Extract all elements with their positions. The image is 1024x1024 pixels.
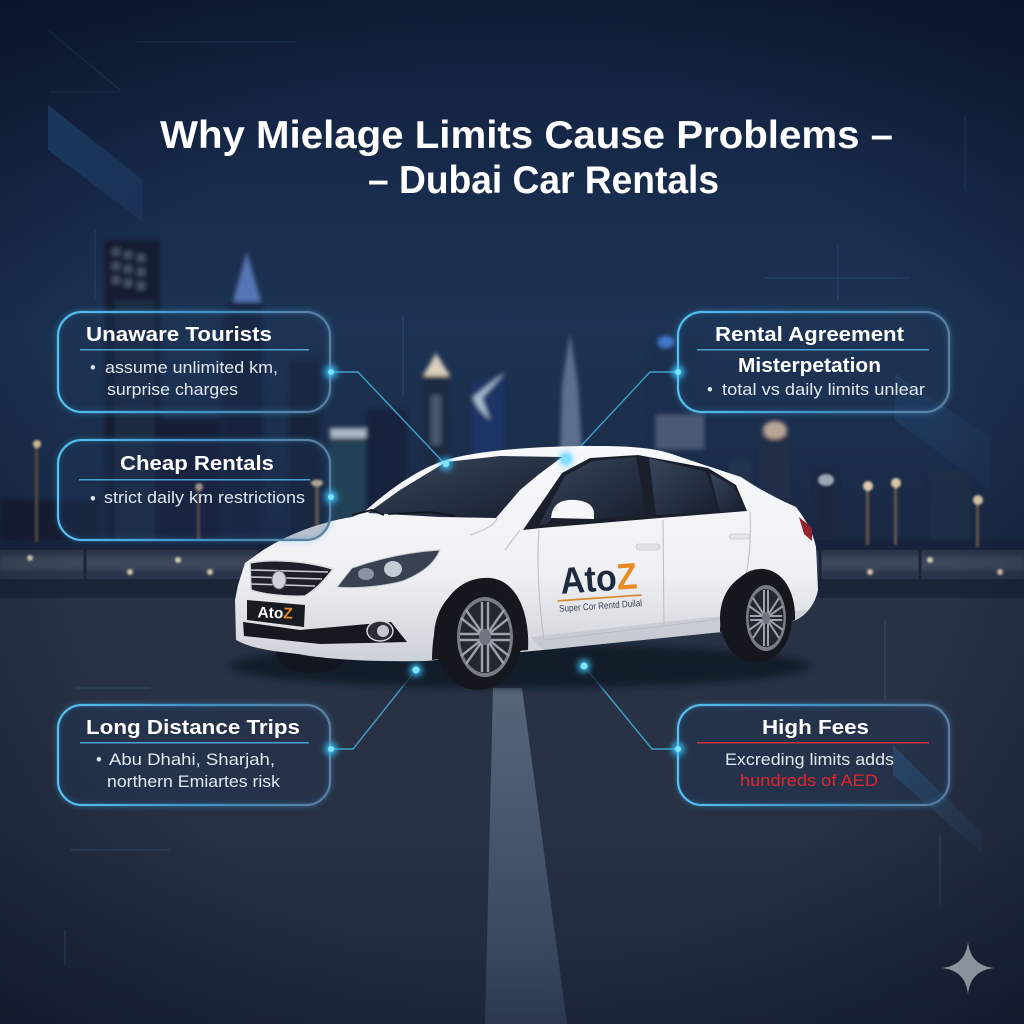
far-side wheels xyxy=(276,635,348,673)
panel: Unaware Tourists: assume unlimited km, xyxy=(105,359,278,377)
front plate logo xyxy=(247,600,305,627)
title: – Dubai Car Rentals xyxy=(368,159,719,202)
panel: Rental Agreement Misterpetation xyxy=(678,312,949,412)
grille xyxy=(250,561,333,596)
rear wheel xyxy=(720,573,792,663)
title xyxy=(160,114,893,202)
panel: Unaware Tourists: surprise charges xyxy=(107,381,238,399)
icon: sparkle star xyxy=(942,942,994,994)
car xyxy=(230,446,818,690)
panel: High Fees: hundreds of AED xyxy=(740,772,878,790)
panel: Cheap Rentals xyxy=(58,440,330,540)
door logo: AtoZ xyxy=(559,555,639,602)
guardrail with city lights xyxy=(0,548,1024,598)
panel: Long Distance Trips: Abu Dhahi, Sharjah, xyxy=(109,751,275,769)
quarter window xyxy=(710,473,745,512)
title: Why Mielage Limits Cause Problems – xyxy=(160,114,893,157)
windshield xyxy=(368,456,562,518)
panel: Long Distance Trips: northern Emiartes risk xyxy=(107,773,281,791)
heading: High Fees xyxy=(762,716,869,739)
panel: Unaware Tourists xyxy=(58,312,330,412)
panel: Long Distance Trips xyxy=(58,705,330,805)
decorative tech shapes xyxy=(48,30,990,490)
mirror xyxy=(551,500,594,521)
front plate logo: AtoZ xyxy=(257,604,294,623)
street lights xyxy=(33,440,983,547)
heading: Cheap Rentals xyxy=(120,452,274,475)
connector lines xyxy=(330,372,678,749)
blurred Dubai skyline xyxy=(0,240,1024,570)
body text: • xyxy=(96,751,102,769)
headlight xyxy=(337,550,440,588)
heading: Unaware Tourists xyxy=(86,323,272,346)
lower intake xyxy=(243,622,407,644)
panel: High Fees xyxy=(678,705,949,805)
panel: Rental Agreement Misterpetation: Misterpetation xyxy=(738,354,881,377)
panel: Cheap Rentals: strict daily km restrictions xyxy=(104,489,305,507)
front side window xyxy=(539,457,646,525)
road centre stripe xyxy=(485,688,567,1024)
fog light xyxy=(367,621,393,641)
car body xyxy=(235,446,818,661)
decorative panels overlay right xyxy=(65,620,981,965)
side windows frame xyxy=(523,455,747,530)
door logo: Super Cor Rentd Duilal xyxy=(559,598,642,615)
door lines and handles xyxy=(470,512,750,640)
wheel arches xyxy=(432,578,528,660)
heading: Long Distance Trips xyxy=(86,716,300,739)
tail light xyxy=(799,517,812,541)
body text: • xyxy=(707,381,713,399)
body text: Excreding limits adds xyxy=(725,751,894,769)
front wheel xyxy=(434,584,522,690)
wipers xyxy=(352,510,455,516)
body text: • xyxy=(90,359,96,377)
panel: Rental Agreement Misterpetation: total vs daily limits unlear xyxy=(722,381,926,399)
connector nodes xyxy=(325,366,684,755)
rear side window xyxy=(649,458,718,515)
lower shading xyxy=(530,610,808,650)
body text: • xyxy=(90,490,96,508)
ground xyxy=(0,598,1024,1024)
background: night sky xyxy=(0,0,1024,600)
heading: Rental Agreement xyxy=(715,323,904,346)
car ground shadow xyxy=(230,644,810,688)
